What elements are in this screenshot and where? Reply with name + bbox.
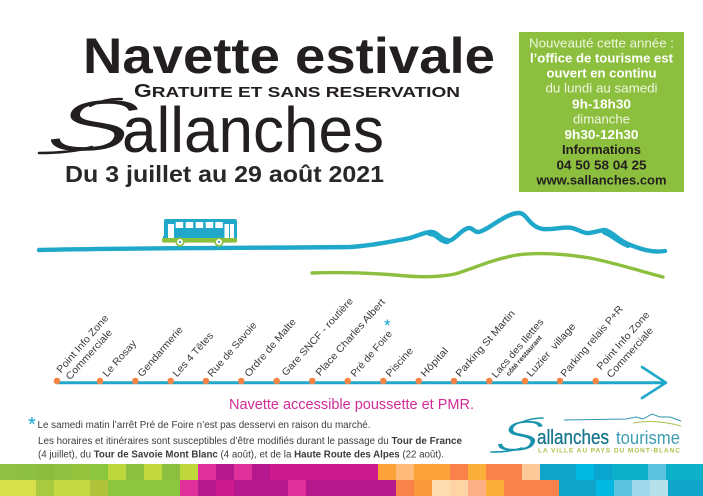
panel: office hours: 9h30-12h30 [564, 128, 639, 142]
wordmark: Sallanches: allanches [122, 94, 384, 166]
panel: office hours: l’office de tourisme est [530, 52, 674, 66]
wordmark: Sallanches [37, 84, 384, 167]
wordmark: Sallanches: S [37, 84, 149, 167]
date range: Du 3 juillet au 29 août 2021 [65, 161, 384, 187]
stop labels: Hôpital [419, 346, 451, 380]
stop labels: Point Info Zone [55, 313, 111, 375]
stop labels: Parking St Martin [454, 308, 518, 379]
asterisk on Pré de Foire: * [384, 316, 391, 335]
stop labels: Commerciale [605, 325, 656, 381]
title: Navette estivale [83, 28, 495, 84]
stop labels: Les 4 Têtes [171, 331, 216, 379]
stop labels: Ordre de Malte [243, 316, 299, 379]
footnotes: (4 juillet), du Tour de Savoie Mont Blanc (4 août), et de la Haute Route des Alpes (22 août). [38, 450, 444, 460]
logo: Sallanches tourisme [490, 412, 681, 461]
logo: Sallanches tourisme: S [490, 412, 549, 461]
stop labels: côté restaurant [505, 334, 544, 378]
footnotes: Le samedi matin l’arrêt Pré de Foire n’est pas desservi en raison du marché. [38, 420, 370, 431]
footnotes [28, 414, 462, 460]
logo: Sallanches tourisme: LA VILLE AU PAYS DU MONT-BLANC [538, 448, 680, 454]
footnotes: * [28, 414, 36, 436]
stop labels [55, 296, 656, 383]
stop labels: Gare SNCF - routière [280, 296, 356, 379]
timeline arrow [57, 367, 666, 398]
logo: Sallanches tourisme: tourisme [616, 428, 680, 448]
footnotes: Les horaires et itinéraires sont susceptibles d’être modifiés durant le passage du Tour de France [38, 436, 462, 447]
stop labels: Parking relais P+R [559, 304, 626, 379]
stop labels: Luzier village [525, 321, 579, 379]
green hill line [312, 254, 663, 277]
stop labels: Pré de Foire [349, 329, 395, 379]
stop labels: Piscine [384, 345, 416, 380]
panel: office hours [519, 32, 684, 192]
logo: Sallanches tourisme: allanches [537, 427, 609, 449]
color mosaic band [0, 464, 703, 496]
stop labels: Lacs des Ilettes [490, 317, 546, 380]
panel: office hours: www.sallanches.com [535, 174, 666, 188]
stop labels: Commerciale [64, 327, 115, 383]
icon: bus [162, 219, 237, 246]
subtitle: G RATUITE ET SANS RESERVATION [134, 81, 460, 101]
panel: office hours: Informations [562, 143, 641, 157]
stop labels: Le Rosay [101, 338, 139, 379]
panel: office hours: 9h-18h30 [572, 97, 631, 111]
stop labels: Gendarmerie [136, 324, 186, 379]
panel: office hours: Nouveauté cette année : [529, 36, 674, 50]
panel: office hours: du lundi au samedi [546, 82, 658, 96]
panel: office hours: ouvert en continu [546, 66, 656, 80]
stop dots [54, 378, 599, 384]
accessibility note: Navette accessible poussette et PMR. [229, 397, 474, 413]
panel: office hours: dimanche [573, 112, 630, 126]
blue mountain line with road [39, 213, 665, 252]
stop labels: Point Info Zone [595, 309, 653, 372]
stop labels: Place Charles Albert [314, 297, 388, 378]
panel: office hours: 04 50 58 04 25 [556, 158, 647, 172]
stop labels: Rue de Savoie [206, 320, 260, 379]
